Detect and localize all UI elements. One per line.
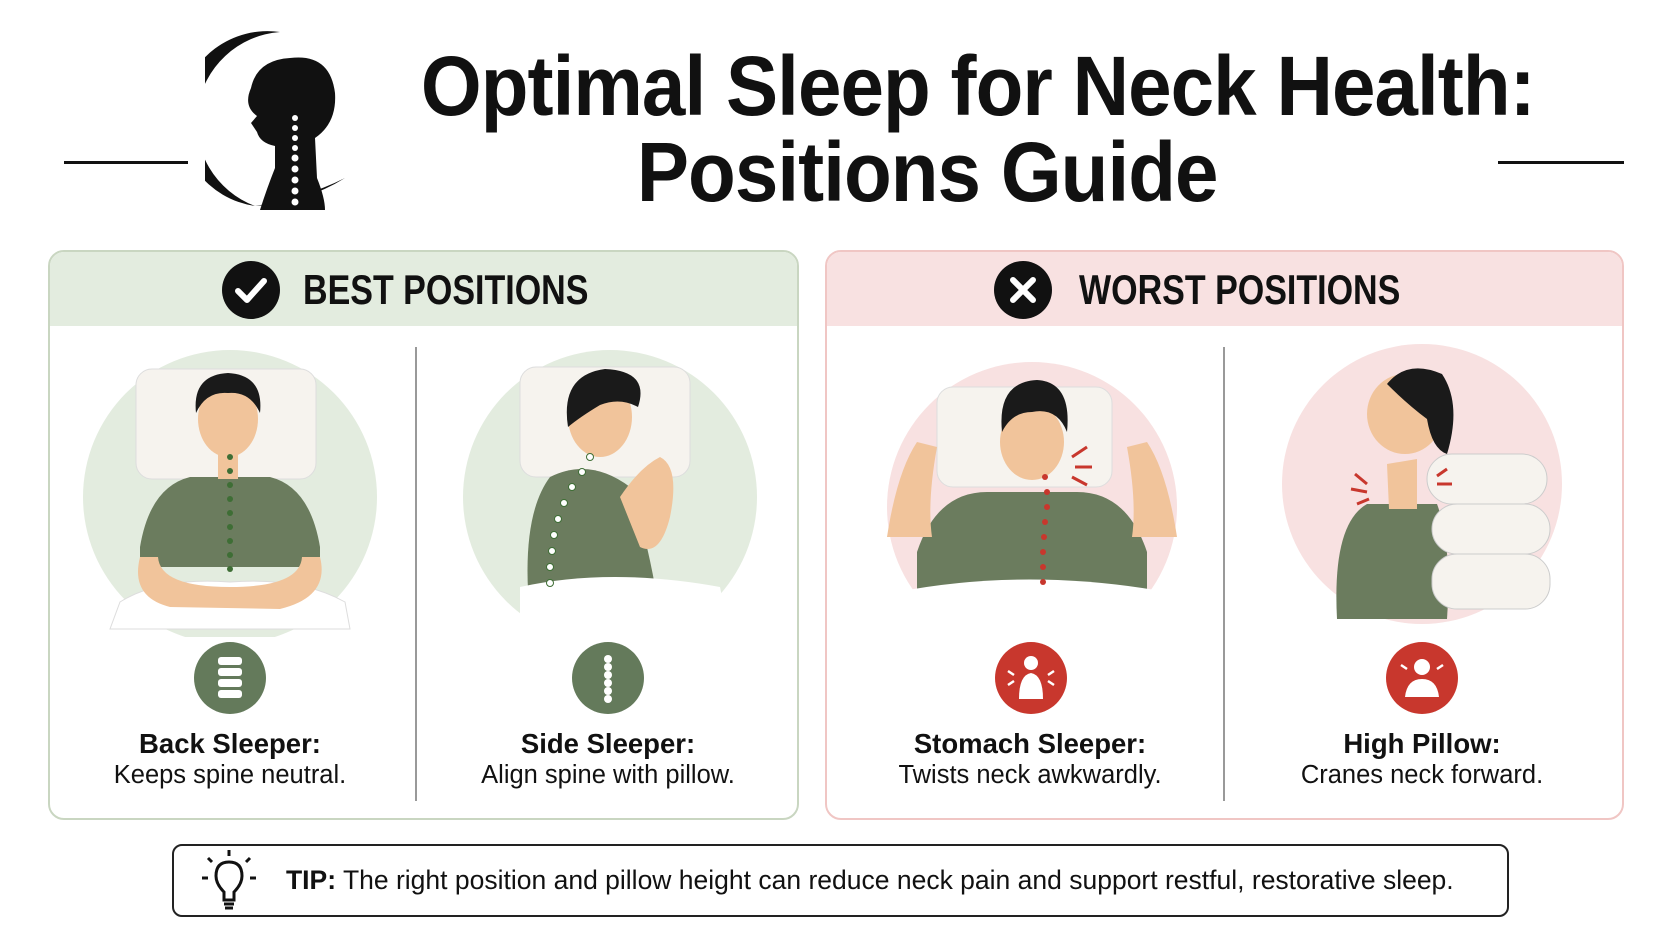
- label: back sleeper: Back Sleeper:: [139, 728, 321, 759]
- panel: worst positions: [825, 250, 1624, 820]
- header: worst: WORST POSITIONS: [1079, 266, 1400, 313]
- label: back sleeper: Keeps spine neutral.: [114, 761, 346, 789]
- label: high pillow: Cranes neck forward.: [1301, 761, 1543, 789]
- illustration: high pillow: [1282, 344, 1562, 624]
- icon: check: [222, 261, 280, 319]
- icon: spine green: [194, 642, 266, 714]
- decorative line right: [1498, 161, 1624, 164]
- icon: neck strain red: [1386, 642, 1458, 714]
- label: side sleeper: Side Sleeper:: [521, 728, 695, 759]
- callout: tip: [172, 844, 1509, 917]
- header: best: [50, 252, 797, 326]
- panel: best positions: [48, 250, 799, 820]
- decorative line left: [64, 161, 188, 164]
- icon: head with spine: [205, 31, 345, 210]
- icon: side spine green: [572, 642, 644, 714]
- label: stomach sleeper: Stomach Sleeper:: [914, 728, 1146, 759]
- icon: pain red: [995, 642, 1067, 714]
- illustration: side sleeper: [463, 350, 757, 613]
- label: high pillow: [1301, 728, 1543, 789]
- icon: lightbulb: [202, 850, 256, 910]
- label: stomach sleeper: [898, 728, 1162, 789]
- label: high pillow: High Pillow:: [1343, 728, 1501, 759]
- label: back sleeper: [114, 728, 346, 789]
- title: [421, 39, 1535, 219]
- illustration: back sleeper: [83, 350, 377, 637]
- header: worst: [827, 252, 1622, 326]
- label: side sleeper: Align spine with pillow.: [481, 761, 735, 789]
- divider: [1223, 347, 1225, 801]
- illustration: stomach sleeper: [887, 362, 1177, 590]
- title: Positions Guide: [637, 125, 1217, 219]
- icon: x: [994, 261, 1052, 319]
- divider: [415, 347, 417, 801]
- label: stomach sleeper: Twists neck awkwardly.: [898, 761, 1162, 789]
- header: best: BEST POSITIONS: [303, 266, 588, 313]
- tip text: TIP: The right position and pillow height can reduce neck pain and support restful, restorative sleep.: [286, 865, 1454, 895]
- label: side sleeper: [481, 728, 735, 789]
- title: Optimal Sleep for Neck Health:: [421, 39, 1535, 133]
